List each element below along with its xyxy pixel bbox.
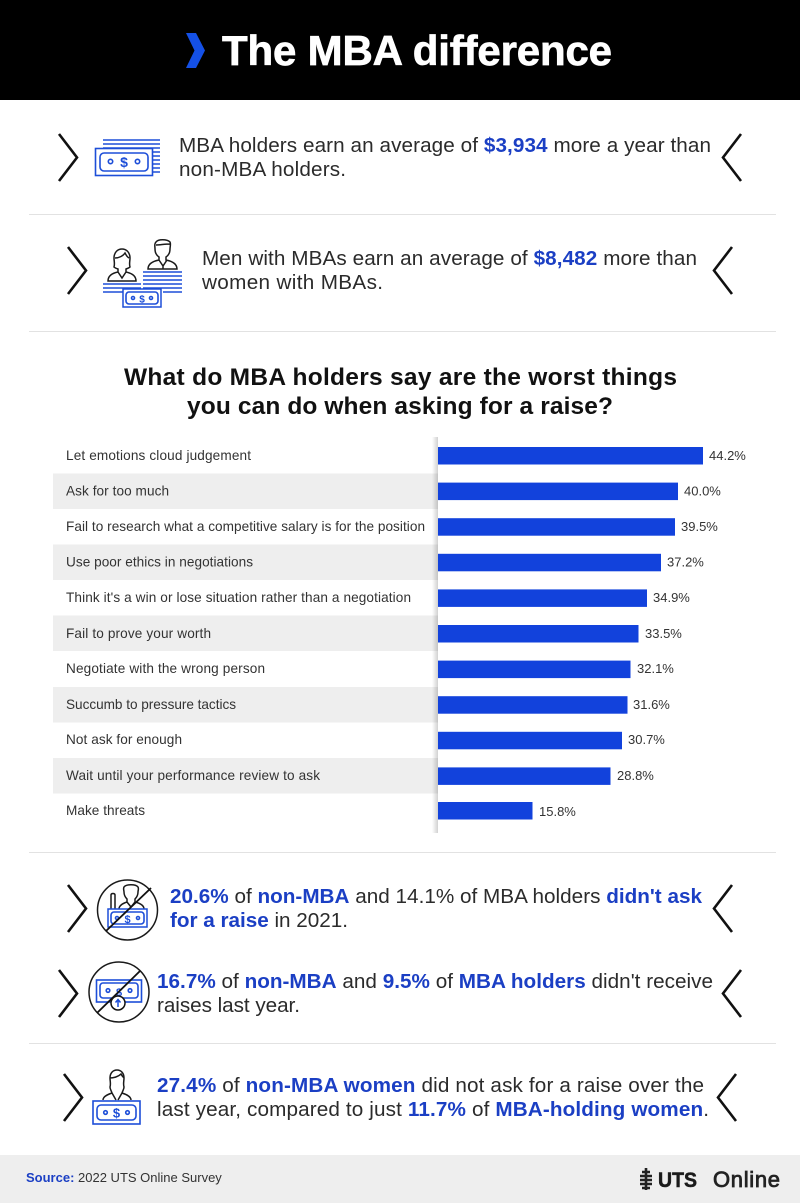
chevron left	[68, 247, 86, 294]
bar values: 34.9%	[653, 590, 690, 605]
bar values: 15.8%	[539, 804, 576, 819]
text block: MBA holders earn an average of $3,934 more a year than	[179, 134, 711, 157]
divider	[29, 214, 776, 215]
row stripes	[53, 474, 438, 794]
category labels: Fail to prove your worth	[66, 626, 211, 641]
category labels: Not ask for enough	[66, 732, 182, 747]
bar values: 31.6%	[633, 697, 670, 712]
stat: gender earnings	[68, 240, 732, 307]
icon: banknotes	[96, 140, 160, 176]
category labels: Let emotions cloud judgement	[66, 448, 251, 463]
text block: 16.7% of non-MBA and 9.5% of MBA holders didn't receive	[157, 970, 713, 993]
icon: no raise request: $	[124, 914, 131, 926]
bar values: 28.8%	[617, 768, 654, 783]
chevron right	[714, 885, 732, 932]
bars	[438, 447, 703, 820]
icon: header chevron	[186, 33, 205, 68]
bar values: 40.0%	[684, 484, 721, 498]
icon: woman and man with banknote	[103, 240, 182, 307]
category labels: Succumb to pressure tactics	[66, 697, 236, 712]
bar values: 30.7%	[628, 732, 665, 747]
category labels: Make threats	[66, 803, 145, 818]
bar chart	[53, 437, 746, 833]
divider	[29, 331, 776, 332]
stat: did not receive raises: raises last year.	[157, 994, 300, 1017]
divider	[29, 852, 776, 853]
divider	[29, 1043, 776, 1044]
footer	[0, 1155, 800, 1203]
text block: Men with MBAs earn an average of $8,482 more than	[202, 247, 697, 270]
logo: UTS	[658, 1169, 697, 1192]
chart heading	[124, 364, 677, 420]
icon: banknotes: $	[120, 154, 128, 170]
chevron left	[59, 134, 77, 181]
text block: 27.4% of non-MBA women did not ask for a raise over the	[157, 1074, 704, 1097]
bar values: 32.1%	[637, 661, 674, 676]
icon: no raise banknote	[89, 962, 149, 1022]
title: The MBA difference	[222, 27, 612, 74]
icon: woman with banknote	[93, 1070, 140, 1124]
stat: women not asking	[64, 1070, 736, 1124]
category labels: Ask for too much	[66, 484, 169, 498]
icon: no raise request	[98, 880, 158, 940]
bar values: 37.2%	[667, 554, 704, 570]
icon: no raise banknote: $	[116, 987, 122, 999]
chevron left	[59, 970, 77, 1017]
icon: woman with banknote: $	[113, 1106, 121, 1120]
header banner	[0, 0, 800, 100]
category labels: Negotiate with the wrong person	[66, 661, 265, 676]
axis shadow	[432, 437, 438, 833]
category labels	[66, 448, 425, 818]
stat: did not ask for a raise: for a raise in 2021.	[170, 909, 348, 932]
bar values	[539, 448, 746, 819]
bar values: 33.5%	[645, 626, 682, 641]
chevron left	[68, 885, 86, 932]
stat: did not receive raises	[59, 962, 741, 1022]
logo: Online	[713, 1167, 780, 1192]
chevron right	[714, 247, 732, 294]
chevron right	[718, 1074, 736, 1121]
stat: gender earnings: women with MBAs.	[201, 271, 383, 294]
chevron right	[723, 970, 741, 1017]
logo	[640, 1167, 780, 1192]
category labels: Use poor ethics in negotiations	[66, 554, 253, 570]
stat: did not ask for a raise	[68, 880, 732, 940]
source: Source: 2022 UTS Online Survey	[26, 1170, 222, 1185]
category labels: Think it's a win or lose situation rather than a negotiation	[66, 590, 411, 605]
bar values: 39.5%	[681, 519, 718, 534]
stat: average earnings: non-MBA holders.	[179, 158, 346, 181]
stat: women not asking: last year, compared to just 11.7% of MBA-holding women.	[157, 1098, 709, 1121]
stat: average earnings	[59, 134, 741, 181]
chevron left	[64, 1074, 82, 1121]
chart heading: What do MBA holders say are the worst things	[124, 364, 677, 391]
category labels: Fail to research what a competitive salary is for the position	[66, 519, 425, 534]
icon: woman and man with banknote: $	[139, 294, 145, 306]
chart heading: you can do when asking for a raise?	[187, 393, 613, 420]
chevron right	[723, 134, 741, 181]
bar values: 44.2%	[709, 448, 746, 463]
text block: 20.6% of non-MBA and 14.1% of MBA holders didn't ask	[170, 885, 702, 908]
category labels: Wait until your performance review to ask	[66, 768, 320, 783]
